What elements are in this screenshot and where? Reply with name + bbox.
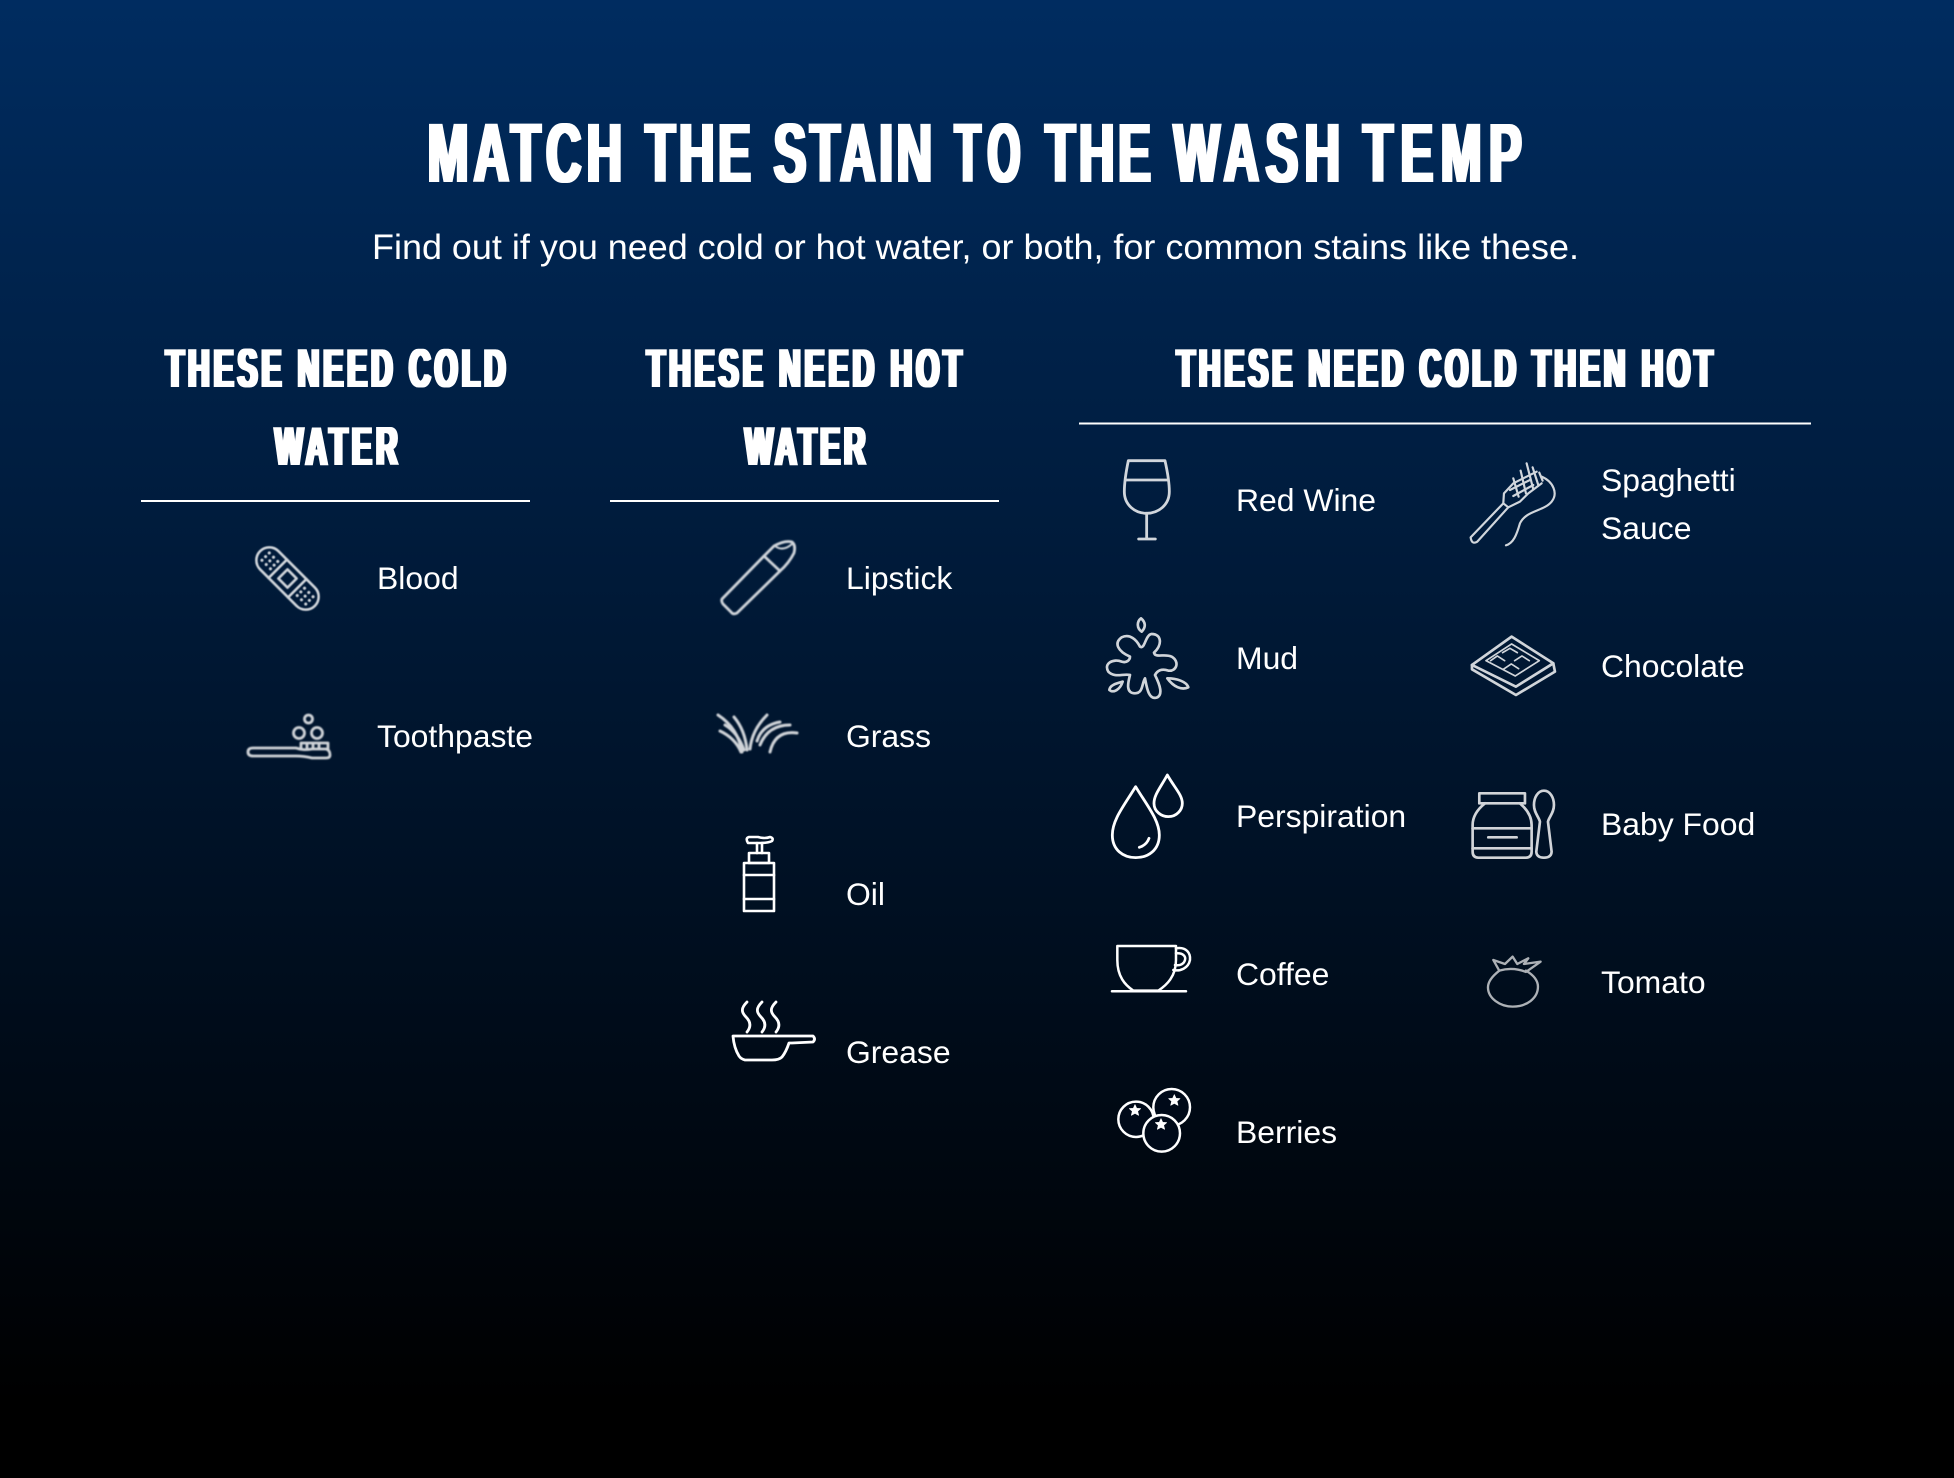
label: chocolate: Chocolate bbox=[1601, 648, 1745, 684]
heading: these need cold water bbox=[166, 338, 506, 477]
heading: these need cold then hot: THESE NEED COLD THEN HOT bbox=[1177, 338, 1713, 399]
label: berries: Berries bbox=[1236, 1114, 1337, 1150]
panel: hot water bbox=[610, 338, 999, 1070]
item: tomato bbox=[1488, 957, 1706, 1007]
item: spaghetti sauce bbox=[1471, 462, 1736, 546]
item: blood bbox=[251, 542, 459, 615]
label: lipstick: Lipstick bbox=[846, 560, 952, 596]
item: baby food bbox=[1473, 791, 1755, 858]
title: MATCH bbox=[428, 106, 622, 200]
icon: frying pan with steam bbox=[733, 1002, 814, 1060]
icon: fork with spaghetti bbox=[1471, 463, 1555, 545]
icon: coffee cup bbox=[1112, 946, 1190, 991]
item: red wine bbox=[1124, 461, 1376, 539]
icon: chocolate bar bbox=[1472, 637, 1555, 695]
item: chocolate bbox=[1472, 637, 1745, 695]
panel: cold then hot bbox=[1079, 338, 1811, 1152]
item: oil bbox=[744, 837, 885, 912]
title: TO bbox=[955, 107, 1020, 201]
item: mud bbox=[1107, 618, 1298, 698]
label: blood: Blood bbox=[377, 560, 459, 596]
icon: tomato bbox=[1488, 957, 1541, 1007]
title: THE bbox=[1045, 106, 1151, 200]
label: spaghetti sauce: Spaghetti bbox=[1601, 462, 1736, 498]
icon: bandage bbox=[251, 542, 324, 615]
icon: grass bbox=[718, 715, 797, 752]
heading: these need hot water: THESE NEED HOT bbox=[647, 338, 962, 399]
item: toothpaste bbox=[248, 715, 533, 758]
subtitle: Find out if you need cold or hot water, or both, for common stains like these. bbox=[372, 228, 1579, 267]
label: baby food: Baby Food bbox=[1601, 806, 1755, 842]
icon: berries bbox=[1118, 1089, 1190, 1152]
heading: these need hot water: WATER bbox=[745, 416, 865, 477]
icon: oil pump bottle bbox=[744, 837, 774, 911]
label: perspiration: Perspiration bbox=[1236, 798, 1406, 834]
heading: these need cold water: WATER bbox=[275, 416, 398, 477]
label: mud: Mud bbox=[1236, 640, 1298, 676]
title: WASH bbox=[1174, 106, 1340, 200]
icon: wine glass bbox=[1124, 461, 1169, 539]
label: coffee: Coffee bbox=[1236, 956, 1329, 992]
title: THE bbox=[645, 106, 751, 200]
label: tomato: Tomato bbox=[1601, 964, 1706, 1000]
label: grass: Grass bbox=[846, 718, 931, 754]
item: grass bbox=[718, 715, 931, 754]
item: coffee bbox=[1112, 946, 1329, 992]
label: oil: Oil bbox=[846, 876, 885, 912]
item: grease bbox=[733, 1002, 951, 1070]
icon: toothbrush bbox=[248, 715, 330, 758]
label: grease: Grease bbox=[846, 1034, 951, 1070]
icon: jar and spoon bbox=[1473, 791, 1554, 858]
icon: water drops bbox=[1112, 775, 1182, 858]
item: lipstick bbox=[722, 542, 952, 614]
icon: lipstick bbox=[722, 542, 795, 614]
label: red wine: Red Wine bbox=[1236, 482, 1376, 518]
title: STAIN bbox=[774, 106, 932, 200]
label: spaghetti sauce: Sauce bbox=[1601, 510, 1691, 546]
title bbox=[428, 106, 1522, 201]
icon: mud splat bbox=[1107, 618, 1188, 698]
title: TEMP bbox=[1363, 106, 1522, 200]
item: perspiration bbox=[1112, 775, 1406, 858]
item: berries bbox=[1118, 1089, 1337, 1152]
panel: cold water bbox=[141, 338, 533, 758]
heading: these need hot water bbox=[647, 338, 962, 477]
heading: these need cold water: THESE NEED COLD bbox=[166, 338, 506, 399]
label: toothpaste: Toothpaste bbox=[377, 718, 533, 754]
